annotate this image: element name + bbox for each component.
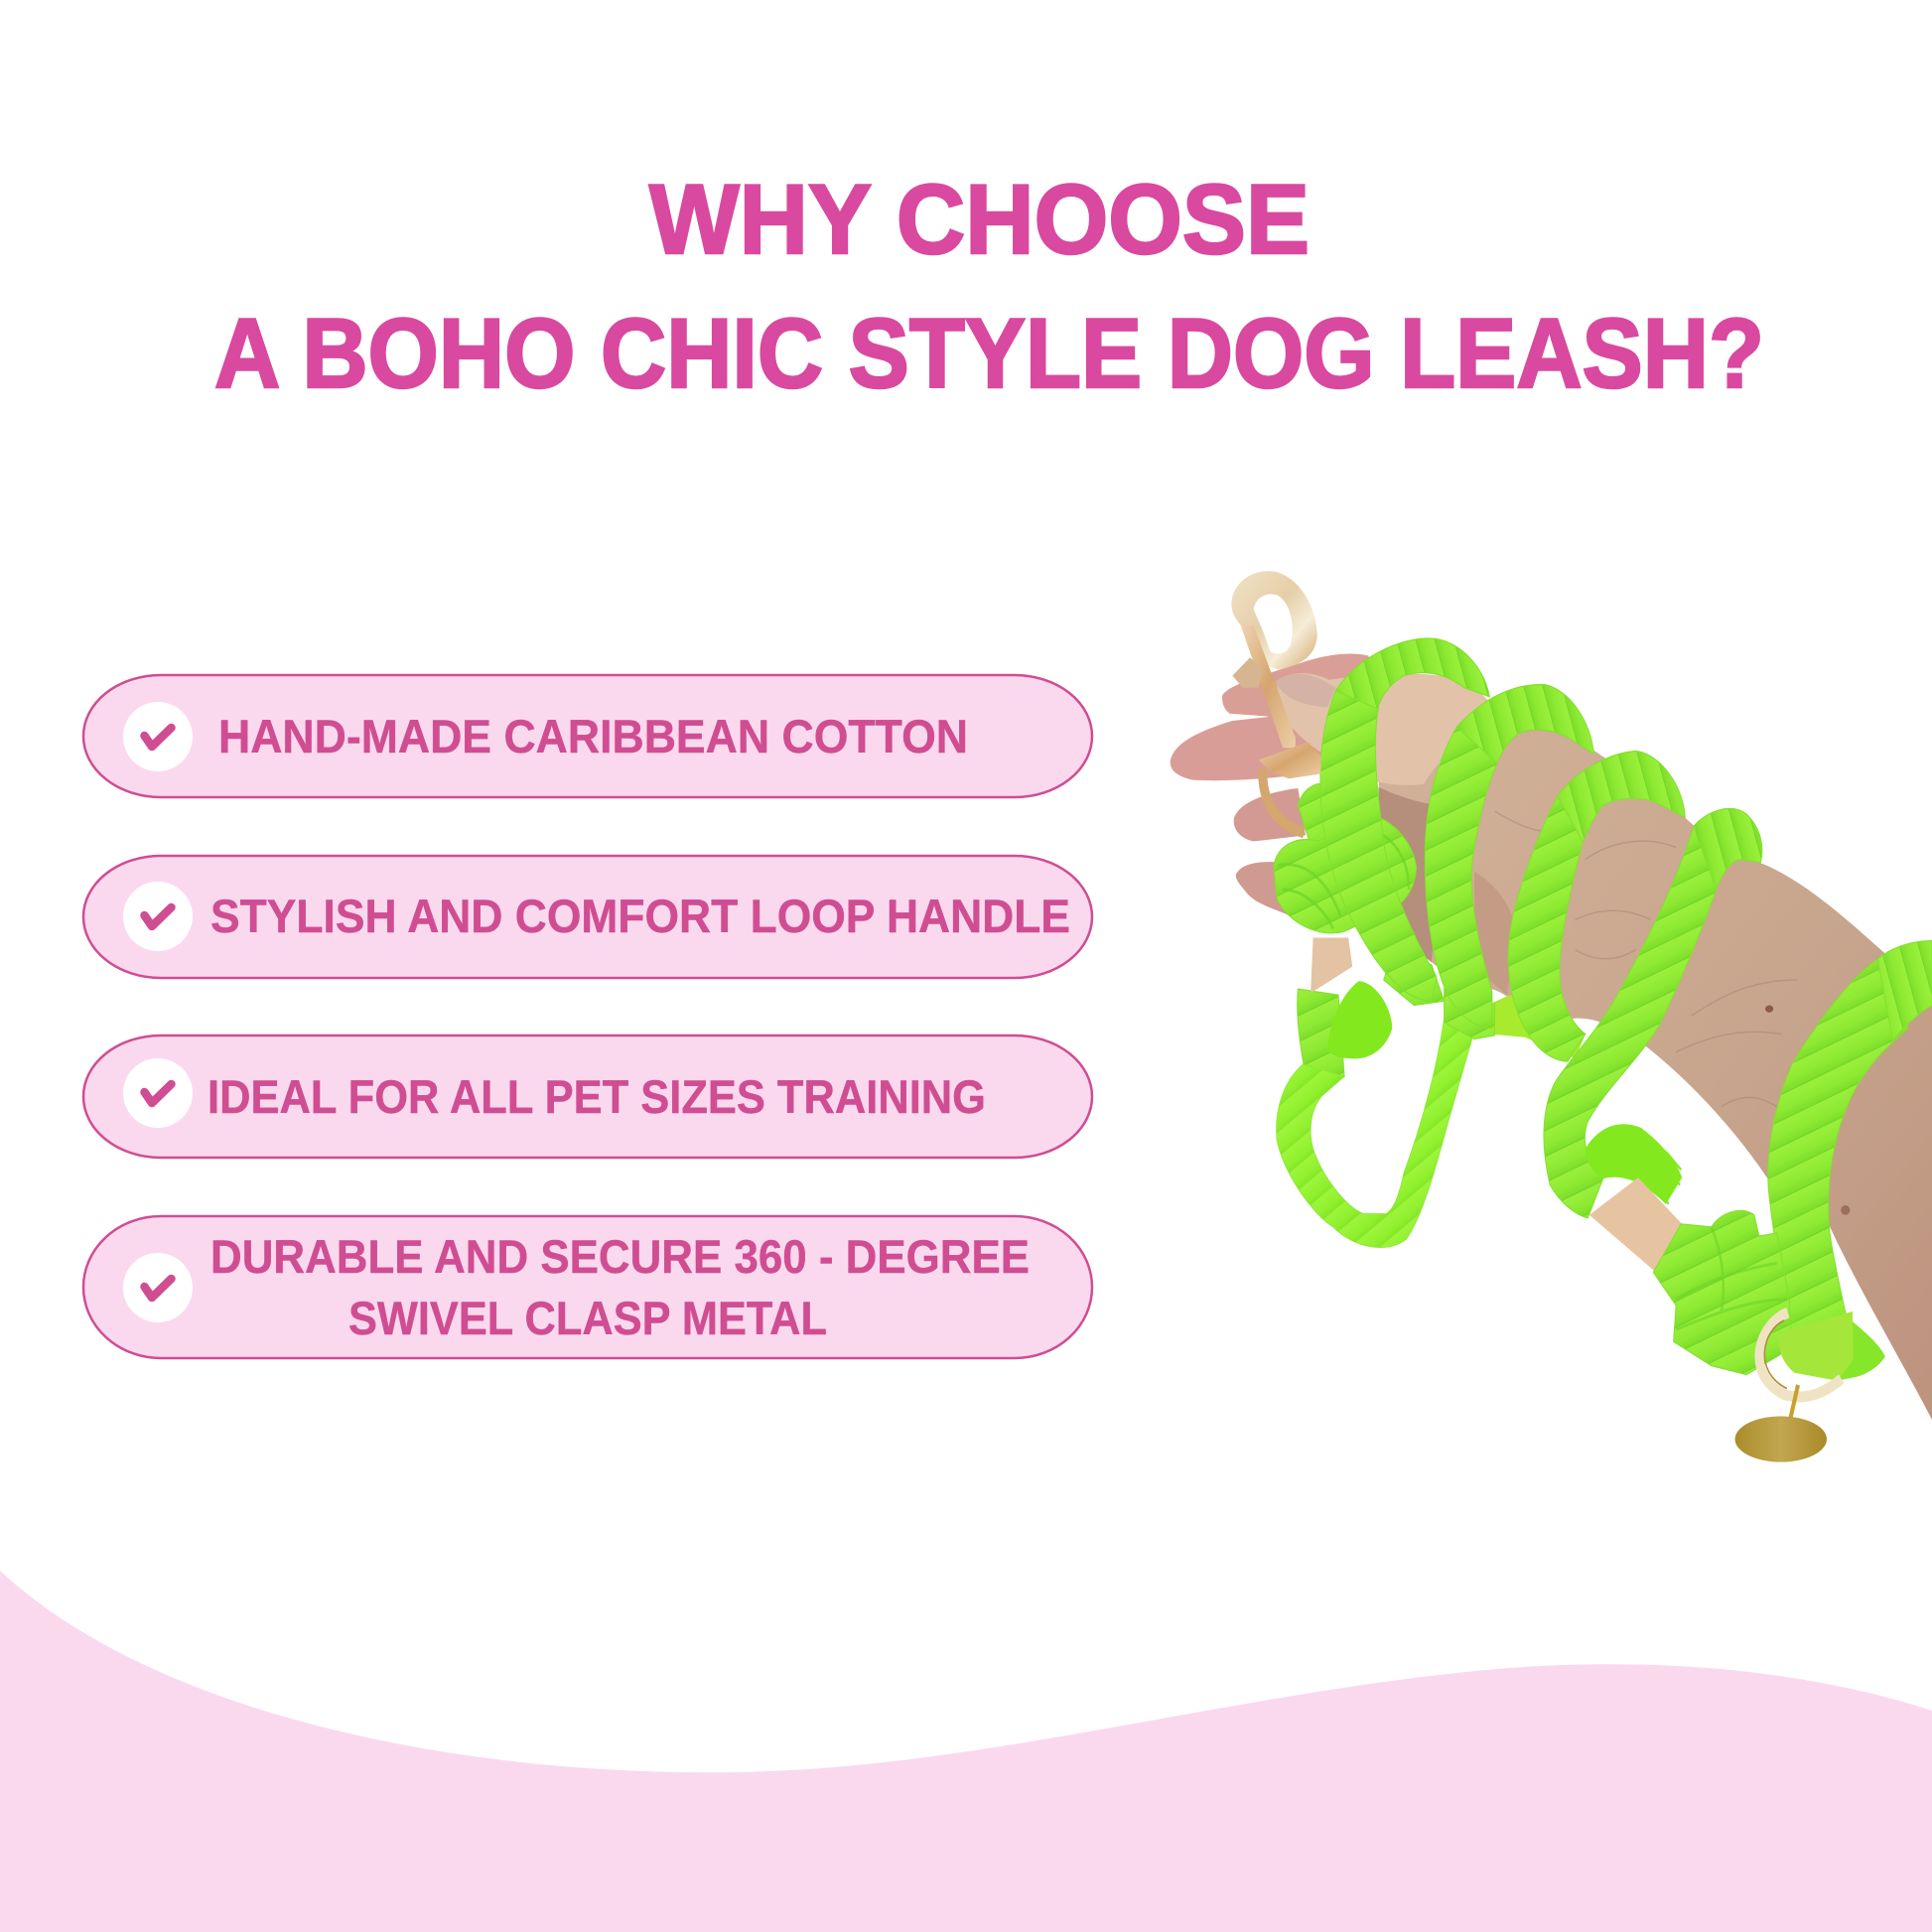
title line 2: A BOHO CHIC STYLE DOG LEASH?	[214, 298, 1764, 408]
pill: swivel clasp	[83, 1216, 1092, 1358]
forearm and palm	[1374, 693, 1932, 1420]
pill: swivel clasp: DURABLE AND SECURE 360 - DEGREE	[210, 1230, 1030, 1283]
panel: feature list	[83, 675, 1092, 1358]
clasp trigger	[1232, 657, 1263, 688]
pill: all pet sizes	[83, 1035, 1092, 1158]
age spot	[1765, 1006, 1773, 1013]
photo: hand holding green rope leash	[1171, 571, 1932, 1462]
title line 1: WHY CHOOSE	[649, 164, 1310, 274]
pill: swivel clasp: SWIVEL CLASP METAL	[348, 1292, 827, 1344]
ring finger	[1236, 862, 1288, 914]
thumb	[1277, 673, 1494, 785]
clasp stem	[1240, 623, 1296, 748]
arm and hand	[1171, 653, 1932, 1420]
beige wrap lower	[1589, 1177, 1682, 1272]
coil 5 arc	[1877, 941, 1932, 1040]
palm shade	[1474, 872, 1515, 995]
coil 4 arc	[1694, 808, 1762, 890]
age spot	[1841, 1205, 1850, 1215]
top finger	[1222, 653, 1379, 721]
pill: hand-made cotton: HAND-MADE CARIBBEAN COTTON	[218, 710, 968, 762]
tassel lower	[1586, 1124, 1682, 1204]
rope coil 1	[1320, 638, 1489, 1001]
rope to upper knot strand	[1298, 783, 1343, 860]
tag link	[1789, 1385, 1798, 1423]
title	[214, 164, 1764, 408]
inner hand shade	[1379, 787, 1445, 962]
middle finger	[1234, 788, 1306, 841]
pill: hand-made cotton	[83, 675, 1092, 797]
pill: loop handle	[83, 856, 1092, 978]
background wave	[0, 1571, 1932, 1932]
pill: all pet sizes: IDEAL FOR ALL PET SIZES TRAINING	[207, 1070, 986, 1123]
coil 3 arc	[1558, 751, 1685, 841]
pointer finger	[1171, 715, 1325, 780]
swivel	[1259, 742, 1321, 778]
rope base by ring	[1779, 1311, 1854, 1381]
rope junction coil 2 to loop	[1445, 989, 1494, 1039]
rope coil 3	[1508, 751, 1685, 1061]
rope junction	[1489, 995, 1586, 1058]
coil 1 arc	[1335, 638, 1489, 709]
lower knot	[1653, 1210, 1792, 1375]
pill: loop handle: STYLISH AND COMFORT LOOP HANDLE	[210, 890, 1070, 942]
rope junction coil 1	[1384, 950, 1445, 1006]
thumb nail	[1276, 674, 1335, 708]
rope coil 2	[1425, 685, 1593, 1029]
rope coil 4	[1544, 808, 1762, 1218]
rope tail right of ring	[1838, 1317, 1885, 1381]
metal tag	[1735, 1417, 1827, 1462]
clasp hook	[1231, 571, 1317, 669]
coil 2 arc	[1456, 685, 1593, 763]
rope coil 5 right	[1768, 941, 1932, 1353]
lower ring	[1759, 1312, 1842, 1397]
tassel top	[1327, 981, 1392, 1058]
upper knot	[1274, 814, 1417, 933]
swivel clasp	[1231, 571, 1321, 833]
handle loop	[1277, 1010, 1477, 1247]
D ring	[1263, 769, 1304, 833]
palm wrinkles	[1494, 811, 1797, 1107]
rope section by top tassel	[1298, 989, 1344, 1076]
beige wrap top	[1311, 938, 1352, 993]
